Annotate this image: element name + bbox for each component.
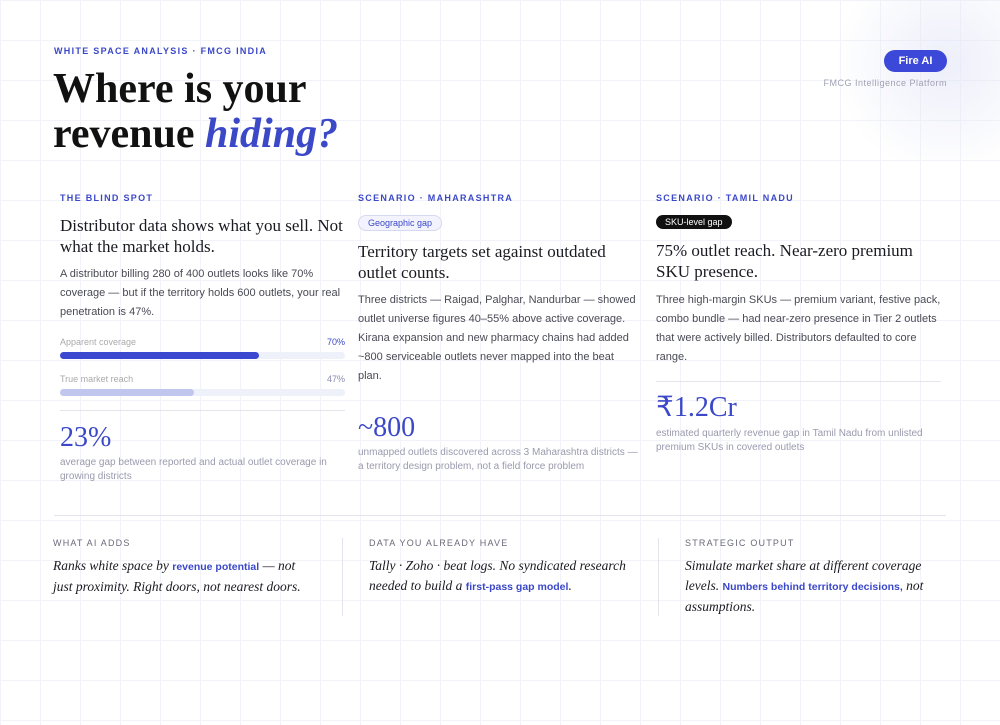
panel: maharashtra: SCENARIO · MAHARASHTRA [358, 193, 513, 203]
kicker: WHITE SPACE ANALYSIS · FMCG INDIA [54, 46, 267, 56]
bar chart: True market reach [60, 374, 133, 384]
panel: tamil nadu [656, 193, 941, 453]
brand badge [823, 50, 947, 88]
panel: blind spot: average gap between reported and actual outlet coverage in growing districts [60, 457, 327, 482]
bottom: strategic output: Simulate market share at different coverage levels. Numbers behind territory decisions, not assumptions. [685, 558, 923, 614]
panel: blind spot: THE BLIND SPOT [60, 193, 153, 203]
title [53, 66, 338, 157]
bottom: data you already have: Tally · Zoho · beat logs. No syndicated research needed to build a first-pass gap model. [369, 558, 626, 593]
panel: maharashtra: Three districts — Raigad, Palghar, Nandurbar — showed outlet universe figures 40–55% above active coverage. Kirana expansion and new pharmacy chains had added ~800 serviceable outlets never mapped into the beat plan. [358, 294, 636, 382]
bottom: what ai adds [52, 538, 301, 594]
panel: tamil nadu: Three high-margin SKUs — premium variant, festive pack, combo bundle — had near-zero presence in Tier 2 outlets that were actively billed. Distributors defaulted to core range. [656, 294, 940, 363]
panel: tamil nadu: estimated quarterly revenue gap in Tamil Nadu from unlisted premium SKUs in covered outlets [656, 428, 923, 453]
panel: maharashtra: Territory targets set against outdated outlet counts. [358, 242, 606, 282]
bottom: strategic output: STRATEGIC OUTPUT [685, 538, 795, 548]
bar chart: Apparent coverage [60, 337, 136, 347]
panel: blind spot: 23% [60, 422, 111, 453]
panel: blind spot [60, 193, 345, 482]
panel: blind spot: Distributor data shows what you sell. Not what the market holds. [60, 216, 343, 256]
panel: blind spot: A distributor billing 280 of 400 outlets looks like 70% coverage — but if the territory holds 600 outlets, your real penetration is 47%. [60, 268, 340, 318]
bottom: what ai adds: WHAT AI ADDS [53, 538, 131, 548]
panel: tamil nadu: ₹1.2Cr [656, 392, 737, 423]
brand badge: FMCG Intelligence Platform [823, 78, 947, 88]
brand badge: Fire AI [899, 55, 932, 67]
panel: tamil nadu: 75% outlet reach. Near-zero premium SKU presence. [656, 241, 913, 281]
title: revenue hiding? [53, 111, 338, 157]
bar chart [60, 337, 345, 396]
panel: maharashtra [358, 193, 638, 472]
title: Where is your [53, 66, 307, 112]
panel: maharashtra: Geographic gap [368, 218, 432, 228]
panel: maharashtra: ~800 [358, 412, 415, 443]
bottom: data you already have: DATA YOU ALREADY HAVE [369, 538, 508, 548]
bar chart: 47% [327, 374, 345, 384]
bar chart: 70% [327, 337, 345, 347]
panel: tamil nadu: SCENARIO · TAMIL NADU [656, 193, 794, 203]
bottom: data you already have [369, 538, 626, 593]
panel: maharashtra: unmapped outlets discovered across 3 Maharashtra districts — a territory design problem, not a field force problem [358, 447, 638, 472]
bottom: what ai adds: Ranks white space by revenue potential — not just proximity. Right doors, not nearest doors. [53, 558, 301, 594]
panel: tamil nadu: SKU-level gap [665, 217, 723, 227]
